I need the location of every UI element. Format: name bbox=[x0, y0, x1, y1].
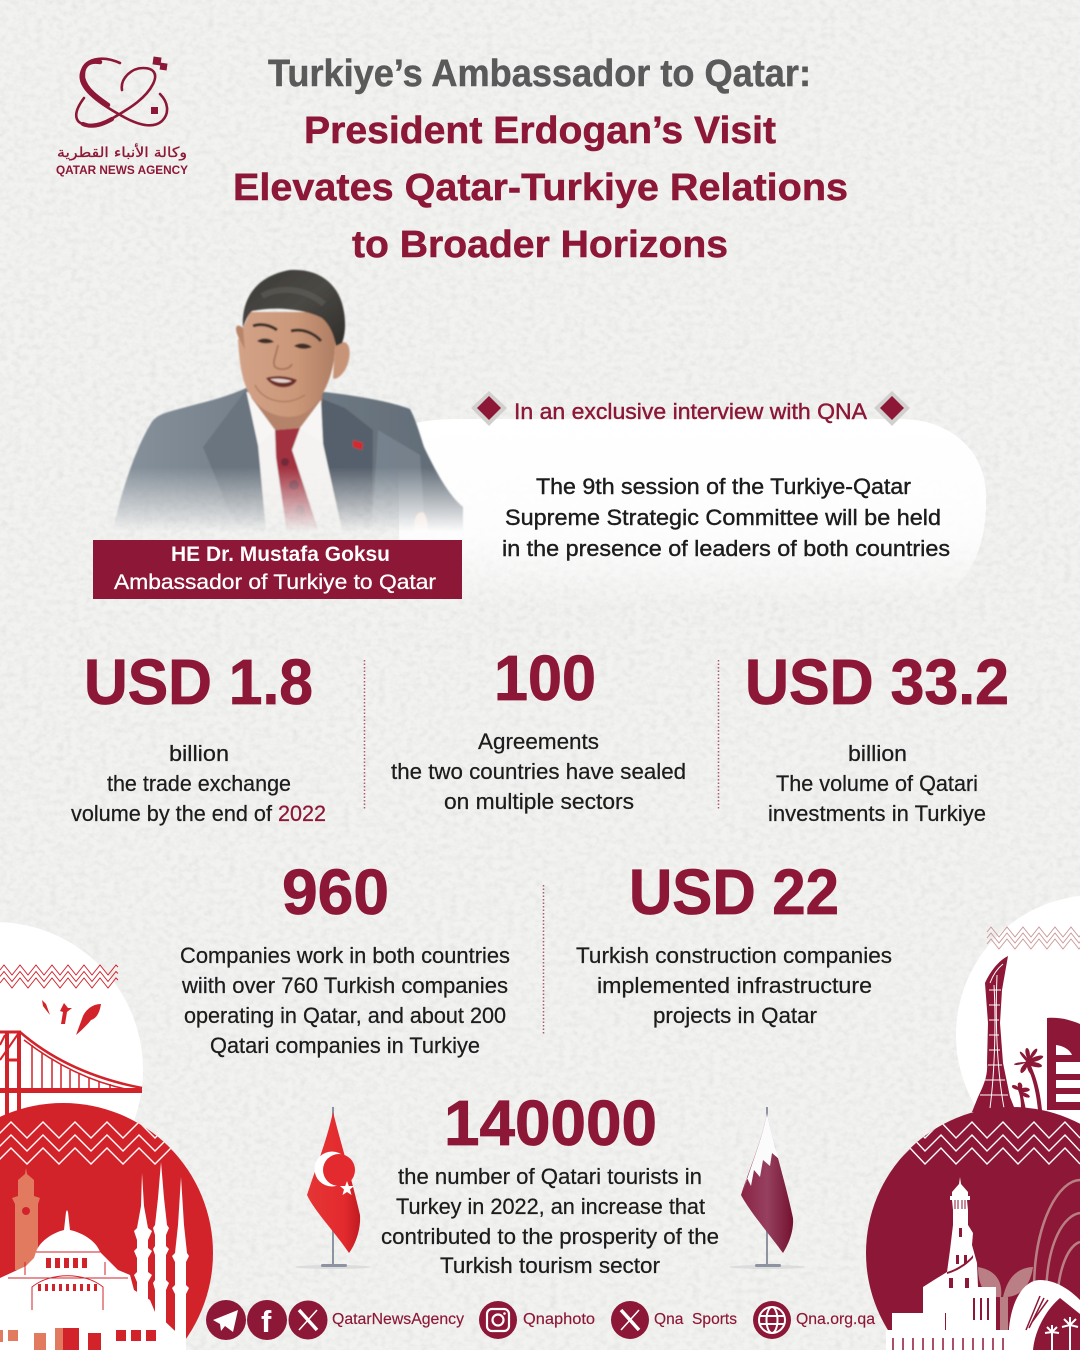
clock face bbox=[22, 1207, 30, 1215]
mosque details bbox=[0, 1252, 156, 1350]
stat: construction: USD 22 bbox=[629, 856, 839, 928]
name banner: HE Dr. Mustafa Goksu bbox=[171, 543, 390, 566]
handle: Qna.org.qa: Qna.org.qa bbox=[796, 1311, 875, 1328]
icon: Qatari flag bbox=[729, 1107, 805, 1269]
divider bbox=[718, 660, 720, 810]
stat: tourists: the number of Qatari tourists in bbox=[398, 1164, 702, 1189]
stat: companies: Qatari companies in Turkiye bbox=[210, 1033, 480, 1058]
stat: agreements: 100 bbox=[494, 642, 596, 714]
mosque body bbox=[0, 1162, 189, 1350]
stat: Qatari investments: investments in Turkiye bbox=[768, 801, 986, 826]
stat: Qatari investments bbox=[745, 646, 1009, 826]
stat: Qatari investments: The volume of Qatari bbox=[776, 771, 978, 796]
stat: trade exchange bbox=[71, 646, 326, 826]
zigzag ornament white bbox=[0, 1122, 187, 1164]
logo: Qatar News Agency: وكالة الأنباء القطرية bbox=[57, 143, 187, 161]
Aspire tower bbox=[972, 956, 1016, 1112]
handle: QatarNewsAgency: QatarNewsAgency bbox=[332, 1311, 464, 1328]
stat: tourists: contributed to the prosperity of the bbox=[381, 1224, 719, 1249]
title: Elevates Qatar-Turkiye Relations bbox=[233, 167, 848, 209]
white arch and palms bbox=[1009, 1280, 1080, 1350]
stat: construction: Turkish construction companies bbox=[576, 943, 892, 968]
stat: companies bbox=[180, 856, 510, 1058]
illustration: Turkey skyline bbox=[0, 922, 213, 1350]
stat: tourists: Turkish tourism sector bbox=[440, 1253, 660, 1278]
clock tower bbox=[12, 1168, 40, 1270]
stat: construction: projects in Qatar bbox=[653, 1003, 817, 1028]
title: to Broader Horizons bbox=[352, 224, 728, 266]
stat: tourists: 140000 bbox=[444, 1087, 657, 1159]
base colonnade bbox=[886, 1330, 1011, 1350]
divider bbox=[364, 660, 366, 810]
stat: trade exchange: volume by the end of bbox=[71, 801, 273, 826]
zigzag ornament pink bbox=[987, 927, 1080, 949]
handle: Qnaphoto: Qnaphoto bbox=[523, 1311, 595, 1328]
stat: companies: Companies work in both countries bbox=[180, 943, 510, 968]
stat: trade exchange: 2022 bbox=[278, 801, 326, 826]
divider bbox=[542, 885, 544, 1035]
illustration: Qatar skyline bbox=[866, 895, 1080, 1350]
stat: tourists: Turkey in 2022, an increase that bbox=[396, 1194, 705, 1219]
bridge bbox=[0, 1032, 142, 1115]
birds bbox=[42, 1000, 101, 1035]
panel: interview white blob bbox=[398, 419, 986, 606]
name banner: Ambassador of Turkiye to Qatar bbox=[114, 571, 436, 594]
stat: Qatari investments: USD 33.2 bbox=[745, 646, 1009, 718]
icon: Turkish flag bbox=[295, 1107, 371, 1269]
stat: construction bbox=[576, 856, 892, 1028]
icon: facebook bbox=[247, 1300, 287, 1340]
icon: instagram bbox=[479, 1301, 517, 1339]
title: Turkiye’s Ambassador to Qatar: bbox=[268, 53, 811, 95]
handle: Qna Sports: Qna Sports bbox=[654, 1311, 737, 1328]
icon: X bbox=[288, 1300, 328, 1340]
interview heading with diamonds: In an exclusive interview with QNA bbox=[514, 399, 867, 424]
stat: trade exchange: billion bbox=[169, 741, 229, 766]
stat: companies: operating in Qatar, and about 200 bbox=[184, 1003, 506, 1028]
arcs bbox=[1034, 1180, 1080, 1350]
text block: committee statement: The 9th session of the Turkiye-Qatar bbox=[536, 474, 911, 499]
stat: trade exchange: USD 1.8 bbox=[84, 646, 313, 718]
zigzag ornament white bbox=[894, 1122, 1080, 1164]
stat: agreements: the two countries have sealed bbox=[391, 759, 686, 784]
stat: companies: wiith over 760 Turkish companies bbox=[181, 973, 508, 998]
stat: companies: 960 bbox=[282, 856, 389, 928]
stat: Qatari investments: billion bbox=[848, 741, 907, 766]
leaf shape bbox=[978, 1267, 1033, 1330]
text block: committee statement bbox=[502, 474, 950, 561]
text block: committee statement: Supreme Strategic Committee will be held bbox=[505, 505, 941, 530]
stat: agreements bbox=[391, 642, 686, 814]
stat: tourists bbox=[381, 1087, 719, 1278]
logo: Qatar News Agency bbox=[56, 56, 188, 177]
icon: X sports bbox=[611, 1301, 649, 1339]
icon: facebook: f bbox=[261, 1304, 272, 1339]
stat: agreements: Agreements bbox=[478, 729, 599, 754]
name banner bbox=[93, 540, 462, 599]
stepped building bbox=[1047, 1018, 1080, 1110]
icon: globe bbox=[753, 1301, 791, 1339]
stat: construction: implemented infrastructure bbox=[597, 973, 872, 998]
title bbox=[233, 53, 848, 266]
social bar bbox=[206, 1300, 875, 1340]
icon: telegram bbox=[206, 1300, 246, 1340]
zigzag ornament red bbox=[0, 965, 118, 988]
title: President Erdogan’s Visit bbox=[304, 110, 776, 152]
portrait: ambassador bbox=[112, 270, 463, 540]
palm trees bbox=[1012, 1048, 1043, 1110]
stat: trade exchange: the trade exchange bbox=[107, 771, 291, 796]
spiral minaret bbox=[892, 1177, 996, 1330]
stat: agreements: on multiple sectors bbox=[444, 789, 634, 814]
interview heading with diamonds bbox=[471, 391, 910, 426]
logo: Qatar News Agency: QATAR NEWS AGENCY bbox=[56, 165, 188, 177]
text block: committee statement: in the presence of leaders of both countries bbox=[502, 536, 950, 561]
